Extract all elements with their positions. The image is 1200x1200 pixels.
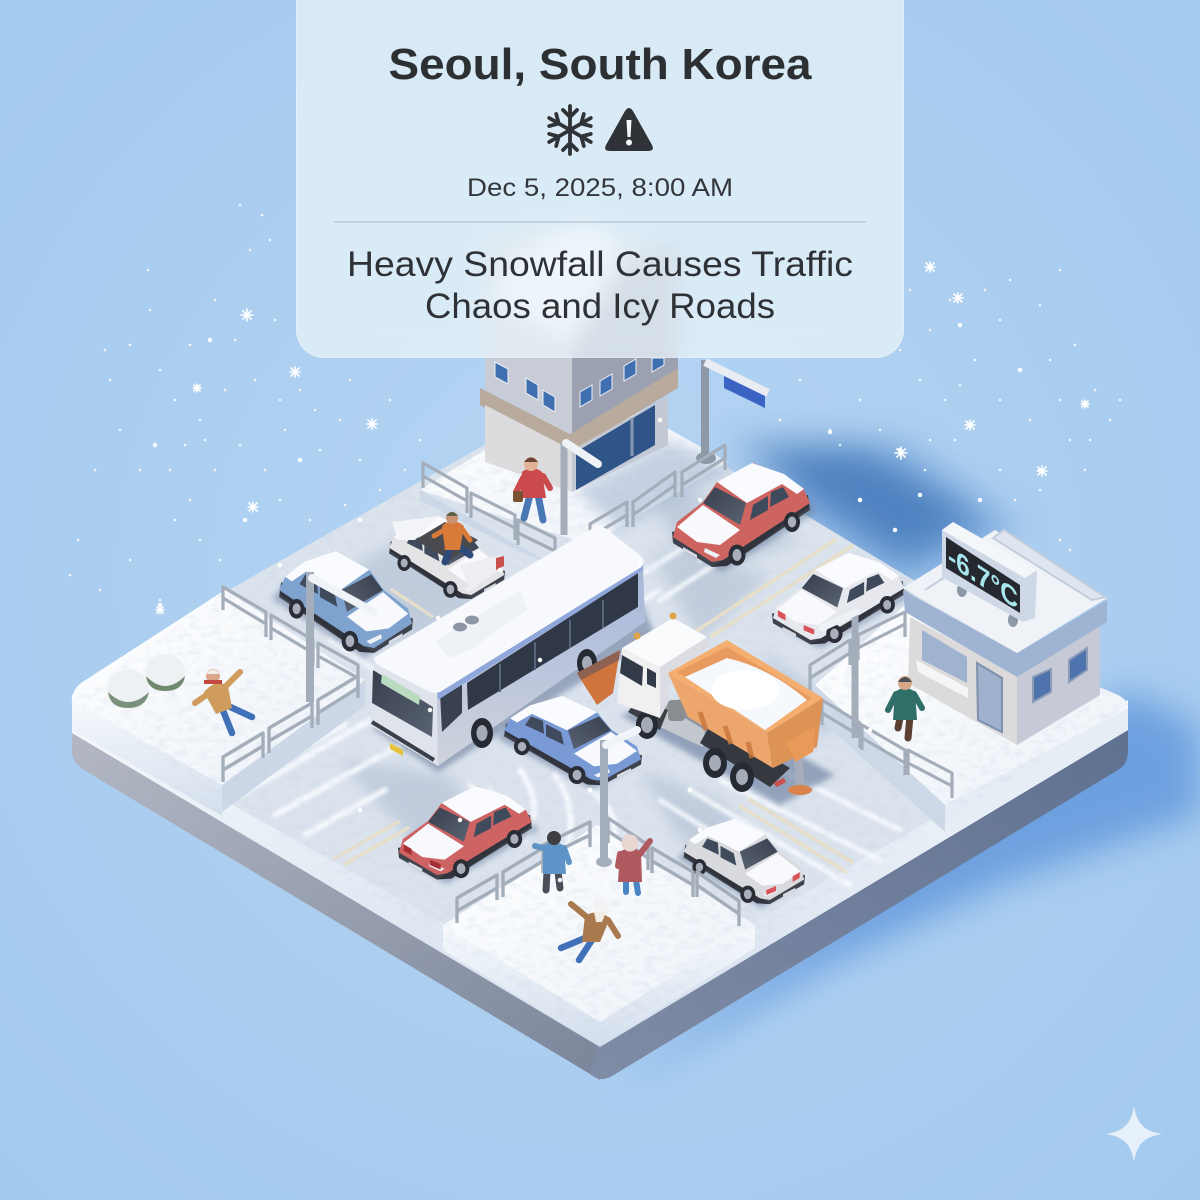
building ground floor: [485, 405, 572, 492]
lamp post: left: [310, 572, 374, 702]
red car: top: [672, 463, 817, 572]
roof vent unit: [435, 590, 527, 658]
salt plow truck: [617, 612, 835, 805]
surface texture: [76, 450, 1116, 1020]
white car: bottom: [677, 819, 805, 908]
building upper walls: [485, 227, 678, 435]
blue car: center: [497, 696, 642, 790]
salt pile: [685, 658, 807, 730]
sign stand: [957, 583, 967, 597]
person: maroon coat pedestrian: [618, 834, 650, 893]
person: red jacket pedestrian: [513, 457, 550, 520]
building: [480, 225, 678, 492]
cab: [617, 648, 660, 718]
shop left wall: [908, 617, 1017, 745]
shop fascia: [903, 590, 1107, 677]
tail lights: [404, 844, 441, 870]
person: snowball thrower: [195, 669, 252, 733]
building snow cap: [490, 225, 618, 345]
title: Seoul, South Korea: [388, 40, 812, 89]
sparkle watermark: [1106, 1106, 1162, 1162]
snow block: top corner: [420, 385, 728, 566]
shop front window: [922, 630, 967, 683]
hopper: [668, 673, 773, 768]
headline: [347, 245, 853, 326]
person: slipping pedestrian: [561, 898, 618, 960]
blue car: left: [272, 551, 413, 658]
snowflakes: [156, 262, 1089, 614]
snow block: bottom corner: [443, 825, 755, 1046]
fence: top block left: [423, 463, 555, 560]
snow block: left corner: [72, 590, 365, 816]
road surface: [72, 385, 1128, 1012]
platform cast shadow: [615, 445, 1200, 1085]
building windows: [495, 358, 664, 412]
headline: Heavy Snowfall Causes Traffic: [347, 245, 853, 284]
headline: Chaos and Icy Roads: [425, 287, 775, 326]
shop side windows: [1033, 669, 1051, 702]
fence: right block lower: [822, 700, 952, 798]
tail lights: [766, 872, 800, 895]
isometric snowy intersection scene: [68, 204, 1200, 1162]
driver: [445, 546, 470, 562]
fence: right block upper: [810, 612, 905, 690]
person: blue jacket pedestrian: [535, 831, 569, 890]
convertible interior: [415, 522, 478, 560]
fence: top block right: [590, 445, 725, 549]
bus roof snow: [374, 526, 644, 693]
frosted header card: [296, 0, 904, 358]
spreader: [798, 755, 800, 785]
temperature sign: [942, 522, 1037, 622]
bus front: [370, 657, 438, 766]
hopper ribs: [700, 712, 752, 758]
tail lights: [778, 610, 814, 635]
lamp post: center: [596, 730, 637, 867]
tyre tracks: [240, 510, 900, 885]
person: green coat pedestrian: [888, 676, 922, 738]
fence: left block bottom edge: [223, 676, 358, 782]
beacon lights: [634, 632, 640, 640]
icon: warning triangle: [605, 108, 653, 151]
header card content: [334, 40, 866, 326]
orange plow blade: [577, 650, 620, 705]
street sign: [696, 360, 768, 464]
building cornice band: [480, 368, 678, 452]
front fender: [628, 695, 668, 730]
truck shadow: [620, 700, 835, 805]
road shading: [290, 470, 860, 880]
red car: bottom: [398, 786, 539, 884]
snow block: right corner: [815, 605, 1128, 838]
building shadow: [575, 440, 735, 530]
icon: snowflake: [546, 106, 594, 154]
city bus: [370, 526, 655, 772]
snow edge of platform: [72, 695, 1128, 1047]
bus shadow: [372, 600, 655, 772]
platform base slab: [72, 725, 1128, 1080]
shop right wall: [1017, 625, 1100, 745]
temperature sign: -6.7°C: [948, 539, 1018, 616]
lamp post: top: [564, 442, 598, 535]
fuel tank: [668, 700, 685, 721]
road lane markings: [335, 540, 852, 872]
bus side: [437, 563, 645, 766]
convenience shop: [903, 522, 1107, 745]
shop door: [977, 663, 1002, 732]
falling snow: [70, 205, 1120, 880]
chassis: [655, 690, 800, 770]
white car: right: [772, 553, 911, 649]
fence: left block top edge: [223, 587, 358, 690]
truck wheels: [636, 711, 658, 739]
white convertible with driver: [389, 512, 505, 599]
fence: bottom block right: [608, 818, 739, 926]
bus wheels: [471, 718, 493, 748]
lamp post: right: [822, 610, 856, 738]
bushes: [107, 654, 185, 708]
shop roof snow: [903, 530, 1107, 653]
fence: bottom block left: [457, 822, 590, 923]
date and time: Dec 5, 2025, 8:00 AM: [467, 174, 733, 202]
